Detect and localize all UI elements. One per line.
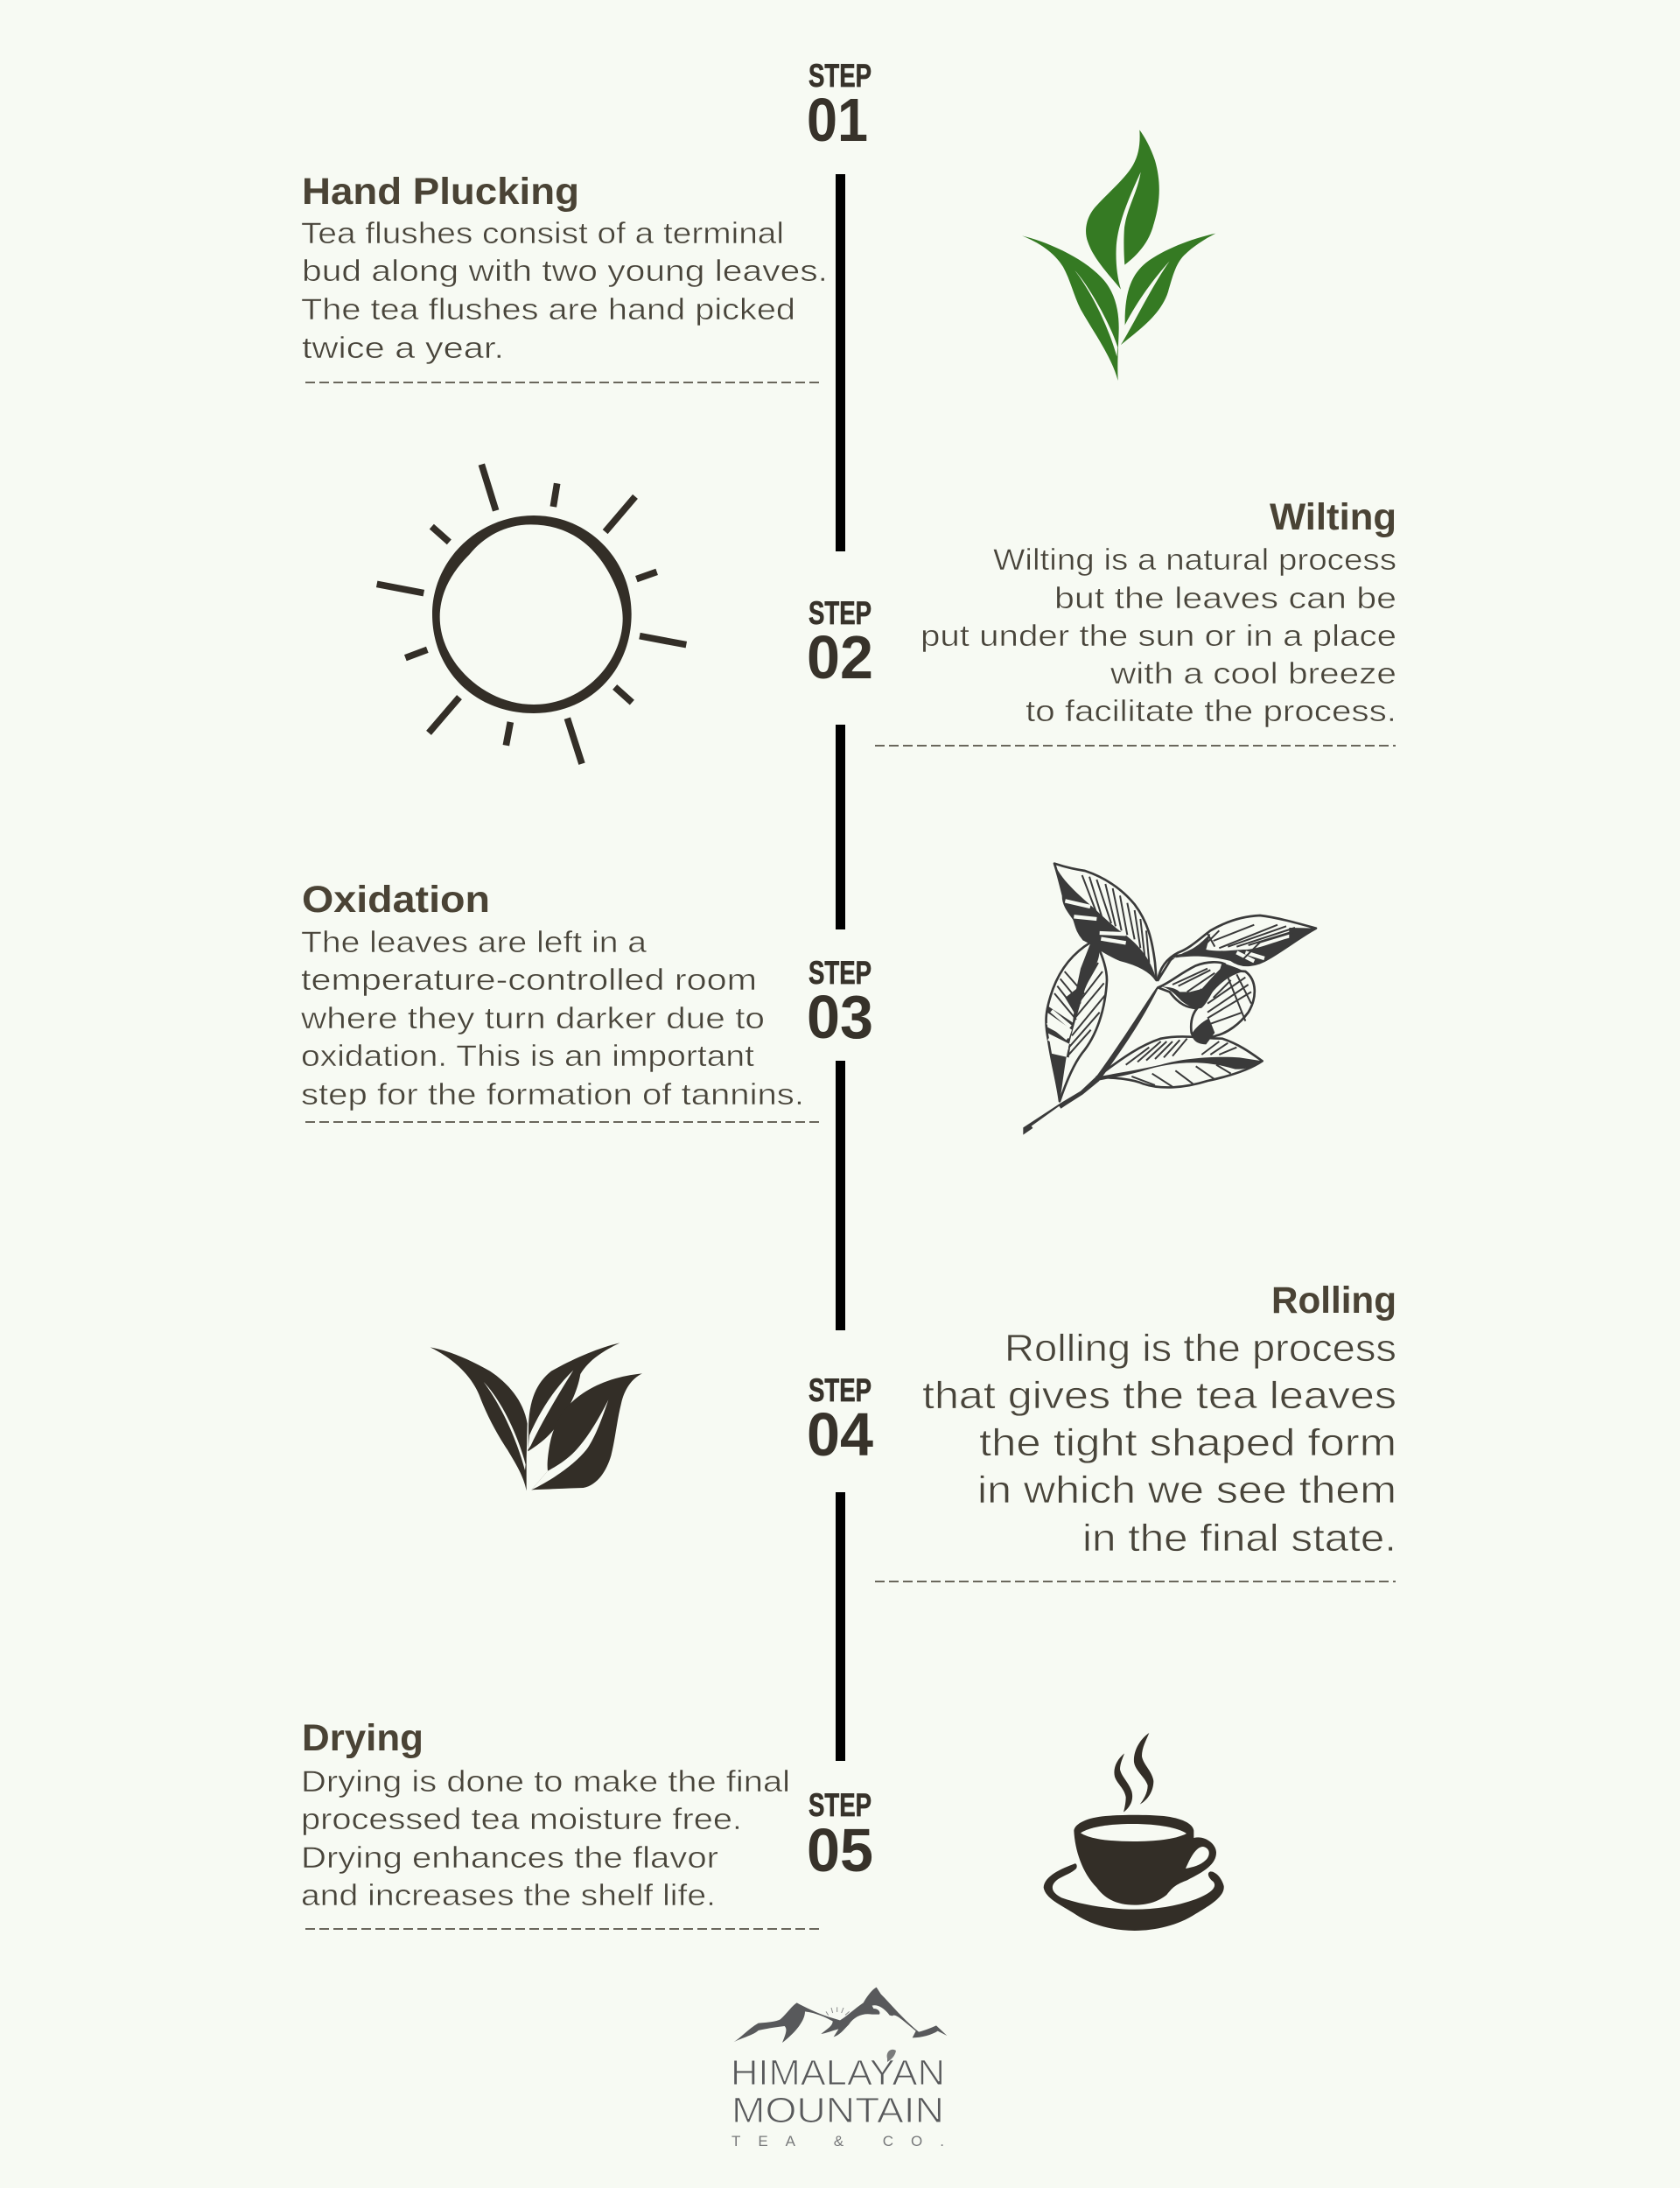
body: oxidation: where they turn darker due to [300, 1002, 765, 1035]
body: oxidation: oxidation. This is an important [301, 1040, 755, 1073]
icon: tea cup [1044, 1733, 1224, 1931]
step 2 marker: 02 [807, 623, 873, 691]
icon: tea branch illustration [1023, 864, 1316, 1135]
body: rolling: Rolling is the process [1004, 1327, 1396, 1370]
timeline bar segments [836, 174, 845, 1761]
icon: green tea leaves [1022, 130, 1215, 381]
body: hand plucking [301, 217, 828, 365]
body: hand plucking: twice a year. [302, 332, 504, 365]
body: oxidation: The leaves are left in a [301, 926, 647, 959]
body: drying: Drying is done to make the final [301, 1765, 790, 1799]
body: wilting: put under the sun or in a place [920, 620, 1396, 653]
body: wilting: Wilting is a natural process [993, 543, 1396, 577]
step 1 marker [807, 58, 872, 154]
step 5 marker: 05 [807, 1816, 873, 1884]
wordmark line two: MOUNTAIN [732, 2090, 944, 2130]
step 2 marker [807, 595, 873, 691]
panel: hand plucking [301, 171, 828, 382]
body: oxidation: step for the formation of tannins. [301, 1078, 804, 1112]
heading: rolling: Rolling [1271, 1280, 1396, 1322]
heading: wilting: Wilting [1270, 496, 1396, 538]
body: rolling: in which we see them [977, 1469, 1396, 1511]
body: rolling: that gives the tea leaves [922, 1374, 1396, 1417]
heading: drying: Drying [302, 1717, 424, 1759]
heading: oxidation: Oxidation [302, 879, 490, 921]
body: hand plucking: Tea flushes consist of a terminal [301, 217, 784, 250]
body: drying: Drying enhances the flavor [301, 1841, 718, 1875]
panel: rolling [875, 1280, 1396, 1581]
panel: drying [301, 1717, 820, 1929]
step 4 marker: 04 [807, 1400, 873, 1469]
step 1 marker: STEP [808, 58, 872, 94]
heading: hand plucking: Hand Plucking [302, 171, 579, 213]
body: hand plucking: The tea flushes are hand picked [301, 293, 795, 326]
step 5 marker [807, 1787, 873, 1884]
step 3 marker: 03 [807, 983, 873, 1051]
body: wilting: to facilitate the process. [1026, 695, 1396, 728]
body: oxidation [300, 926, 804, 1112]
step 4 marker: STEP [808, 1372, 872, 1408]
step 5 marker: STEP [808, 1787, 872, 1823]
body: rolling: in the final state. [1082, 1517, 1396, 1560]
body: oxidation: temperature-controlled room [301, 964, 757, 997]
icon: mountains [733, 1988, 947, 2043]
step 4 marker [807, 1372, 873, 1469]
body: hand plucking: bud along with two young leaves. [302, 255, 828, 288]
step 3 marker [807, 955, 873, 1051]
logo: himalayan mountain tea and co [731, 1988, 947, 2149]
icon: small leaf on y [887, 2050, 896, 2062]
body: rolling: the tight shaped form [979, 1421, 1396, 1464]
icon: sun [377, 465, 686, 764]
step 3 marker: STEP [808, 955, 872, 991]
panel: wilting [875, 496, 1396, 746]
wordmark: HIMALAYAN [731, 2052, 945, 2093]
body: wilting: but the leaves can be [1054, 582, 1396, 615]
body: wilting: with a cool breeze [1110, 657, 1396, 691]
tagline: TEA & CO. [732, 2133, 944, 2149]
panel: oxidation [300, 879, 820, 1122]
body: drying [301, 1765, 790, 1912]
body: wilting [920, 543, 1396, 728]
body: drying: and increases the shelf life. [301, 1879, 716, 1912]
body: rolling [922, 1327, 1396, 1560]
icon: dark tea leaves [430, 1343, 642, 1490]
step 2 marker: STEP [808, 595, 872, 631]
step 1 marker: 01 [807, 86, 868, 154]
body: drying: processed tea moisture free. [301, 1803, 742, 1836]
